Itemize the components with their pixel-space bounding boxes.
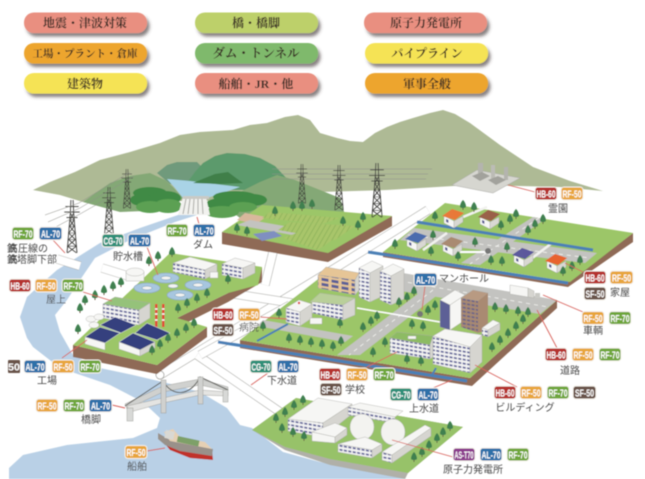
panel: town platform: [218, 261, 557, 386]
tan building: [318, 267, 359, 295]
power lines: [45, 169, 432, 229]
callout: 高圧線の鉄塔脚下部: 鉄塔脚下部: [7, 253, 57, 266]
pill: 船舶・JR・他: [195, 73, 318, 94]
factory: [86, 297, 164, 328]
callout: ビルディング: SF-50: [575, 388, 594, 400]
callout: 家屋: [565, 263, 633, 300]
callout: 屋上: 屋上: [46, 294, 66, 306]
callout: 道路: RF-70: [600, 350, 620, 362]
callout: 高圧線の鉄塔脚下部: AL-70: [41, 228, 60, 240]
callout: 病院: HB-60: [214, 310, 233, 322]
callout: 車輌: RF-50: [584, 313, 603, 325]
plant buildings: [288, 398, 431, 463]
large building: [433, 329, 482, 373]
callout: 工場: RF-50: [54, 362, 73, 374]
plant buildings: [173, 257, 255, 279]
callout: マンホール: [414, 273, 489, 310]
callout: 下水道: [250, 360, 299, 387]
callout: 学校: SF-50: [322, 384, 341, 396]
callout: 家屋: 家屋: [610, 286, 630, 299]
callout: 船舶: [125, 446, 165, 473]
callout: 高圧線の鉄塔脚下部: RF-70: [14, 228, 33, 240]
pill: パイプライン: [365, 43, 488, 64]
callout: マンホール: マンホール: [439, 273, 489, 285]
pill: パイプライン: パイプライン: [391, 46, 463, 60]
callout: 工場: AL-70: [26, 362, 45, 374]
pylon 6: [369, 163, 385, 217]
callout: 霊園: RF-50: [562, 188, 582, 200]
panel: field platform: [222, 205, 392, 262]
callout: 船舶: 船舶: [127, 460, 147, 473]
callout: 屋上: [9, 279, 112, 306]
callout: 橋脚: RF-70: [64, 400, 84, 412]
callout: 上水道: AL-70: [418, 390, 438, 402]
truck: [510, 285, 540, 298]
callout: 船舶: RF-50: [126, 447, 146, 459]
substation: [452, 163, 520, 193]
panel: water treatment and factory platform: [73, 253, 262, 374]
callout: 病院: SF-50: [214, 325, 233, 337]
pill: 地震・津波対策: [24, 12, 147, 33]
pill: 工場・プラント・倉庫: [24, 43, 147, 64]
callout: 高圧線の鉄塔脚下部: 高圧線の: [8, 242, 48, 255]
callout: 家屋: HB-60: [586, 272, 605, 284]
callout: 霊園: 霊園: [548, 203, 568, 215]
twin towers: [359, 261, 404, 305]
callout: 学校: [319, 352, 397, 396]
ship: [158, 429, 213, 460]
pill: 工場・プラント・倉庫: 工場・プラント・倉庫: [32, 47, 138, 60]
pylon 4: [296, 164, 308, 203]
callout: 車輌: 車輌: [583, 324, 603, 337]
school: [390, 332, 433, 359]
callout: ダム: RF-70: [168, 226, 187, 238]
callout: 道路: [537, 310, 621, 377]
pill: 橋・橋脚: 橋・橋脚: [232, 15, 280, 30]
pill buttons legend: [24, 12, 488, 94]
pill: ダム・トンネル: [195, 43, 318, 64]
callout: 橋脚: AL-70: [91, 400, 110, 412]
callout: 学校: RF-70: [374, 370, 394, 382]
pill: 橋・橋脚: [195, 12, 318, 33]
pill: 軍事全般: [365, 73, 488, 94]
pylon 2: [102, 187, 116, 234]
trees: [75, 199, 583, 462]
pill: 建築物: [24, 73, 147, 94]
hills: [83, 153, 345, 218]
pill: 軍事全般: 軍事全般: [403, 76, 451, 91]
pill: ダム・トンネル: ダム・トンネル: [212, 46, 300, 60]
pill: 建築物: 建築物: [67, 76, 103, 91]
storage tank: [126, 268, 144, 281]
callout: 車輌: [543, 295, 631, 337]
callout: 工場: 50: [8, 362, 20, 374]
river and sea: [9, 215, 407, 479]
callout: ダム: AL-70: [194, 226, 214, 238]
pylon: tower foot: [64, 200, 80, 253]
callout: 橋脚: 橋脚: [81, 413, 101, 426]
lake: [167, 179, 240, 198]
pipelines: [57, 210, 428, 412]
callout: 車輌: RF-70: [610, 313, 630, 325]
callout: 学校: RF-50: [348, 370, 367, 382]
callout: 高圧線の鉄塔脚下部: [7, 227, 65, 266]
callout: 病院: 病院: [239, 322, 259, 334]
callout: 学校: 学校: [345, 383, 365, 396]
callout: ビルディング: HB-60: [496, 388, 515, 400]
callout: 学校: HB-60: [320, 370, 340, 382]
callout: 貯水槽: 貯水槽: [113, 250, 143, 263]
houses: [405, 209, 567, 273]
pill: 原子力発電所: [364, 12, 487, 33]
pill: 船舶・JR・他: 船舶・JR・他: [219, 76, 293, 91]
callout: 道路: 道路: [560, 364, 580, 377]
pill: 地震・津波対策: 地震・津波対策: [43, 15, 127, 30]
pylon 3: [121, 169, 133, 208]
illustration scene: [9, 110, 633, 479]
callout: 霊園: HB-60: [536, 188, 556, 200]
blue factory roofs: [85, 317, 170, 356]
callout: 貯水槽: AL-70: [130, 236, 149, 248]
panel: nuclear plant platform: [252, 398, 463, 479]
callout: 下水道: CG-70: [252, 362, 271, 374]
callout: 屋上: RF-70: [64, 280, 83, 292]
callout: 貯水槽: CG-70: [104, 236, 123, 248]
callout: 工場: [8, 340, 101, 387]
callout: 原子力発電所: AL-70: [482, 450, 501, 462]
pylon 5: [332, 165, 346, 210]
pill: 原子力発電所: 原子力発電所: [390, 15, 462, 30]
hospital: [286, 293, 355, 326]
callout: 上水道: 上水道: [409, 402, 439, 415]
callout: 橋脚: [36, 399, 125, 426]
callout: 病院: [212, 308, 287, 337]
callout: 道路: RF-50: [574, 350, 593, 362]
callout: 原子力発電所: AS-T70: [454, 450, 474, 462]
callout: 工場: 工場: [37, 374, 57, 387]
callout: マンホール: AL-70: [416, 274, 435, 286]
callout: 家屋: RF-50: [612, 272, 631, 284]
callout: 道路: HB-60: [546, 350, 566, 362]
callout: ダム: ダム: [193, 238, 213, 251]
callout: ビルディング: RF-50: [522, 388, 541, 400]
panel: residential platform: [368, 203, 633, 287]
callout: 上水道: [390, 380, 452, 415]
callout: 病院: RF-50: [240, 310, 259, 322]
callout: 屋上: RF-50: [36, 280, 56, 292]
callout: 高圧線の鉄塔脚下部: 鉄: [7, 242, 17, 255]
clarifier tanks: [134, 273, 211, 300]
callout: 家屋: SF-50: [586, 288, 605, 300]
right towers: [440, 290, 500, 337]
forest: [130, 172, 267, 218]
callout: 原子力発電所: 原子力発電所: [443, 463, 503, 476]
callout: 下水道: 下水道: [267, 374, 297, 387]
callout: 下水道: AL-70: [278, 362, 298, 374]
callout: ビルディング: [475, 365, 596, 414]
callout: 貯水槽: [102, 234, 158, 275]
callout: ビルディング: ビルディング: [495, 401, 555, 414]
callout: 上水道: CG-70: [392, 390, 411, 402]
callout: 工場: RF-70: [80, 362, 100, 374]
callout: 原子力発電所: [392, 440, 529, 476]
callout: 原子力発電所: RF-70: [508, 450, 528, 462]
callout: 屋上: HB-60: [10, 280, 30, 292]
callout: 霊園: [508, 185, 583, 215]
callout: 高圧線の鉄塔脚下部: 高: [8, 253, 18, 266]
callout: ビルディング: RF-70: [548, 388, 568, 400]
mountain backdrop: [33, 110, 603, 202]
callout: ダム: [166, 217, 215, 251]
callout: 橋脚: RF-50: [38, 400, 57, 412]
suspension bridge: [125, 377, 228, 421]
dam: [178, 196, 210, 215]
